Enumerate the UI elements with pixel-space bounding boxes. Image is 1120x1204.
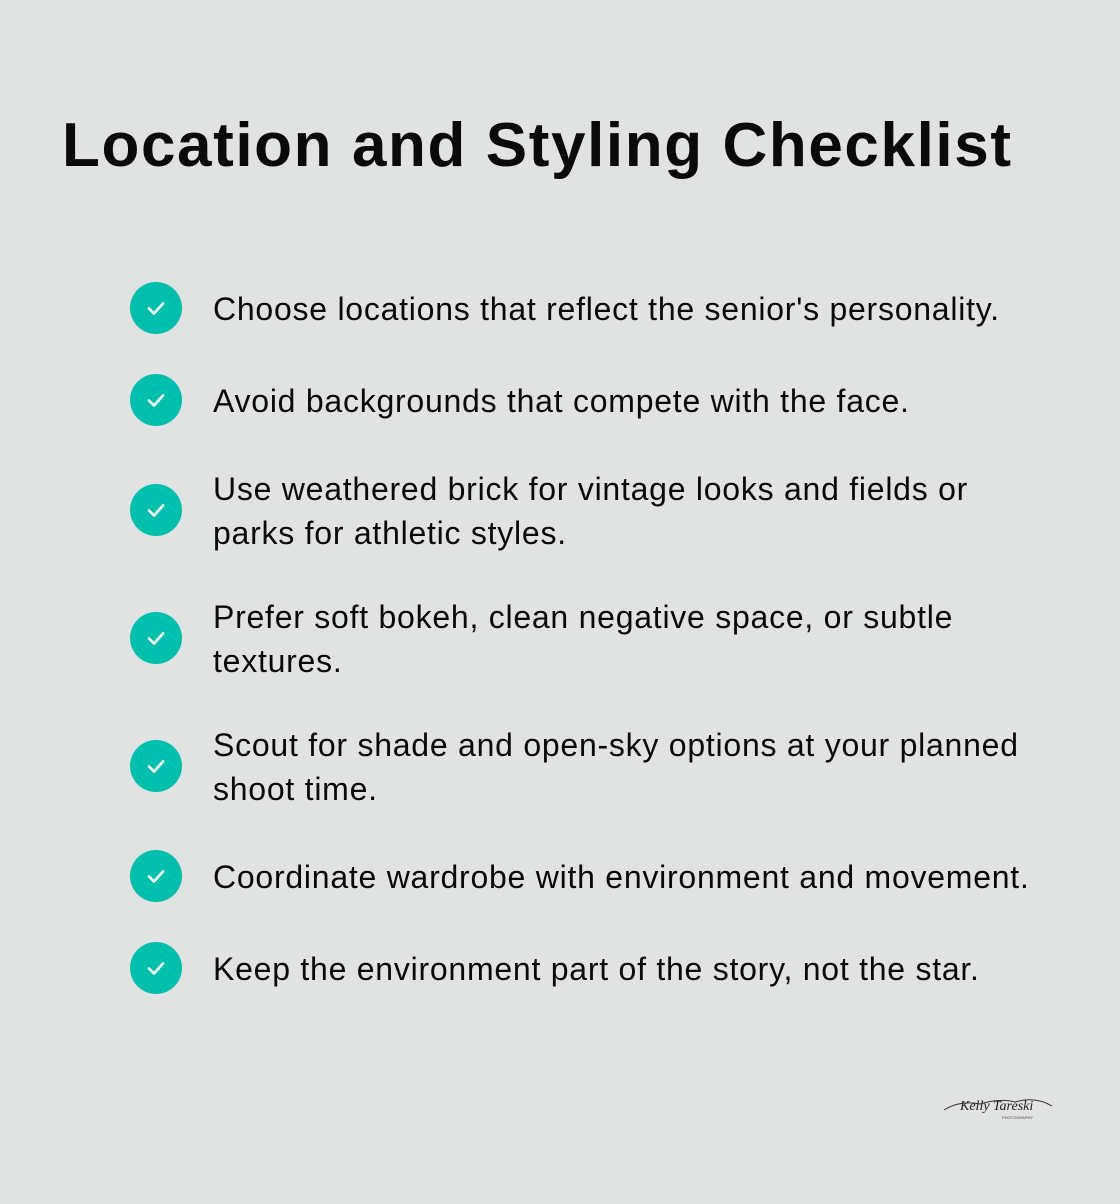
item 3: Use weathered brick for vintage looks and fields or [213, 471, 968, 507]
item 7 [130, 942, 980, 994]
item 2 [130, 374, 910, 426]
item 6: Coordinate wardrobe with environment and movement. [213, 859, 1030, 895]
logo signature [944, 1099, 1052, 1120]
item 1 [130, 282, 1000, 334]
item 4 [130, 599, 953, 679]
logo signature: Kelly Tareski [959, 1099, 1033, 1114]
item 5: Scout for shade and open-sky options at your planned [213, 727, 1019, 763]
item 6 [130, 850, 1030, 902]
item 4: Prefer soft bokeh, clean negative space, or subtle [213, 599, 953, 635]
item 1: Choose locations that reflect the senior's personality. [213, 291, 1000, 327]
item 2: Avoid backgrounds that compete with the face. [213, 383, 910, 419]
item 3 [130, 471, 968, 551]
item 5 [130, 727, 1019, 807]
logo signature: PHOTOGRAPHY [1002, 1115, 1033, 1120]
item 3: parks for athletic styles. [213, 515, 567, 551]
item 7: Keep the environment part of the story, not the star. [213, 951, 980, 987]
item 5: shoot time. [213, 771, 378, 807]
title: Location and Styling Checklist [62, 111, 1013, 180]
item 4: textures. [213, 643, 342, 679]
